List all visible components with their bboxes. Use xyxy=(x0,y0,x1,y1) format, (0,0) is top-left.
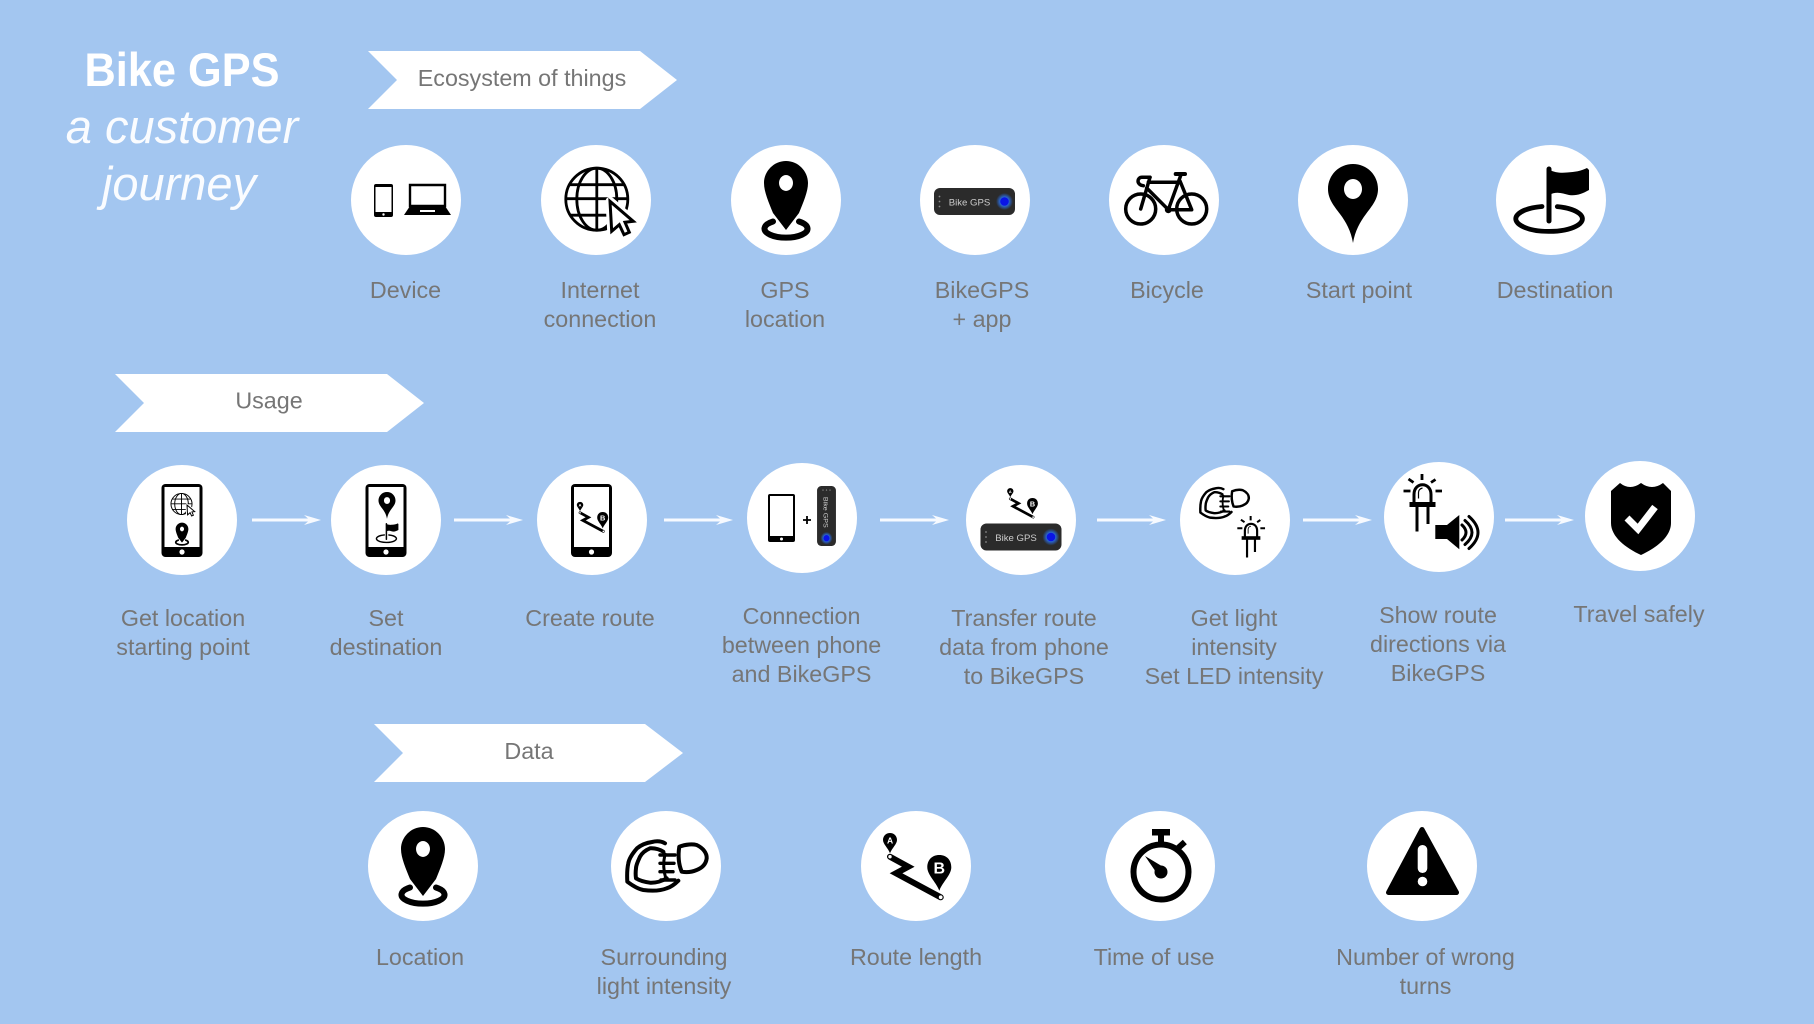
icon: surrounding light xyxy=(611,811,721,921)
label: Location: Location xyxy=(376,944,464,970)
arrow 4 xyxy=(880,515,949,525)
label: GPS location: location xyxy=(745,306,825,332)
label: Destination: Destination xyxy=(1497,277,1613,303)
icon: get location xyxy=(127,465,237,575)
label: Surrounding light intensity: light intensity xyxy=(597,973,732,999)
icon: BikeGPS device xyxy=(920,145,1030,255)
arrow 1 xyxy=(252,515,321,525)
label: Connection between phone and BikeGPS: and BikeGPS xyxy=(732,661,871,687)
label: Get light intensity, Set LED intensity: Set LED intensity xyxy=(1145,663,1324,689)
label: Start point: Start point xyxy=(1306,277,1413,303)
label: Time of use: Time of use xyxy=(1094,944,1214,970)
label: Bicycle: Bicycle xyxy=(1130,277,1204,303)
label: Connection between phone and BikeGPS: Connection xyxy=(743,603,860,629)
icon: GPS location xyxy=(731,145,841,255)
title: Bike GPS xyxy=(84,43,280,96)
label: Transfer route data from phone to BikeGPS: Transfer route xyxy=(951,605,1097,631)
icon: destination xyxy=(1496,145,1606,255)
icon: set destination xyxy=(331,465,441,575)
icon: start point xyxy=(1298,145,1408,255)
label: Get light intensity, Set LED intensity: intensity xyxy=(1191,634,1277,660)
banner: Usage: Usage xyxy=(235,388,303,414)
title xyxy=(66,43,301,210)
label: Route length: Route length xyxy=(850,944,982,970)
label: Show route directions via BikeGPS: Show route xyxy=(1379,602,1497,628)
arrow 7 xyxy=(1505,515,1574,525)
arrow 3 xyxy=(664,515,733,525)
label: Get location starting point: Get location xyxy=(121,605,245,631)
label: Set destination: destination xyxy=(330,634,442,660)
label: Travel safely: Travel safely xyxy=(1573,601,1705,627)
icon: shield travel safely xyxy=(1585,461,1695,571)
icon: show route directions xyxy=(1384,462,1494,572)
icon: warning xyxy=(1367,811,1477,921)
label: Device: Device xyxy=(370,277,441,303)
label: Connection between phone and BikeGPS: between phone xyxy=(722,632,881,658)
label: Surrounding light intensity: Surrounding xyxy=(601,944,727,970)
icon: stopwatch xyxy=(1105,811,1215,921)
title: a customer xyxy=(66,100,301,153)
banner: Usage xyxy=(115,374,424,432)
title: journey xyxy=(96,157,259,210)
label: Number of wrong turns: Number of wrong xyxy=(1336,944,1515,970)
label: GPS location: GPS xyxy=(760,277,810,303)
banner: Data: Data xyxy=(504,738,554,764)
icon: route length xyxy=(861,811,971,921)
arrow 6 xyxy=(1303,515,1372,525)
arrow 5 xyxy=(1097,515,1166,525)
label: BikeGPS + app: + app xyxy=(953,306,1011,332)
icon: location xyxy=(368,811,478,921)
banner: Ecosystem of things xyxy=(368,51,677,109)
label: Get location starting point: starting point xyxy=(116,634,250,660)
label: BikeGPS + app: BikeGPS xyxy=(935,277,1029,303)
icon: bicycle xyxy=(1109,145,1219,255)
icon: internet connection xyxy=(541,145,651,255)
label: Number of wrong turns: turns xyxy=(1400,973,1451,999)
icon: transfer route data xyxy=(966,465,1076,575)
banner: Ecosystem of things: Ecosystem of things xyxy=(418,65,626,91)
label: Create route: Create route xyxy=(525,605,655,631)
arrow 2 xyxy=(454,515,523,525)
icon: connection between phone and BikeGPS xyxy=(747,463,857,573)
label: Internet connection: Internet xyxy=(560,277,640,303)
icon: light intensity and LED xyxy=(1180,465,1290,575)
label: Show route directions via BikeGPS: BikeGPS xyxy=(1391,660,1485,686)
label: Get light intensity, Set LED intensity: Get light xyxy=(1191,605,1278,631)
label: Transfer route data from phone to BikeGPS: to BikeGPS xyxy=(964,663,1084,689)
banner: Data xyxy=(374,724,683,782)
label: Show route directions via BikeGPS: directions via xyxy=(1370,631,1506,657)
label: Transfer route data from phone to BikeGPS: data from phone xyxy=(939,634,1109,660)
icon: create route xyxy=(537,465,647,575)
icon: device xyxy=(351,145,461,255)
label: Set destination: Set xyxy=(369,605,404,631)
label: Internet connection: connection xyxy=(544,306,656,332)
